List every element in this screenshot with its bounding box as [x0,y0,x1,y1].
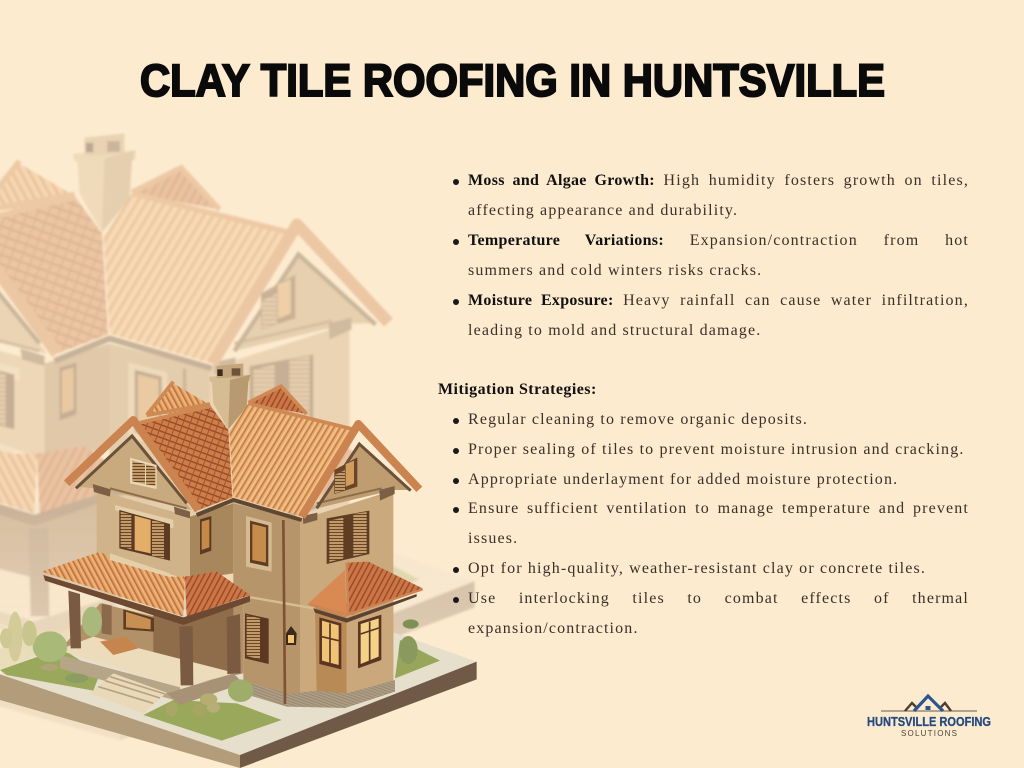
text: temperature variations line two: summers and cold winters risks cracks. [468,262,762,279]
bullet: underlayment [453,478,459,484]
text: proper sealing: Proper sealing of tiles to prevent moisture intrusion and cracking. [468,441,965,458]
main clay tile house with garden platform [0,363,477,768]
logo: Huntsville Roofing Solutions: SOLUTIONS [901,729,957,738]
title: CLAY TILE ROOFING IN HUNTSVILLE [140,55,885,106]
text: interlocking tiles line one: Use interlocking tiles to combat effects of thermal [468,590,969,607]
bullet: moisture exposure [453,299,459,305]
bullet: regular cleaning [453,418,459,424]
text: underlayment: Appropriate underlayment for added moisture protection. [468,471,898,488]
text: regular cleaning: Regular cleaning to remove organic deposits. [468,411,808,428]
text: ventilation line one: Ensure sufficient ventilation to manage temperature and prevent [468,500,969,517]
panel: roofing challenges and mitigation text [438,172,969,637]
faded background house [0,133,474,740]
text: moisture exposure line two: leading to mold and structural damage. [468,322,761,339]
logo: Huntsville Roofing Solutions [867,696,991,738]
bullet: ventilation [453,507,459,513]
bullet: moss and algae growth [453,179,459,185]
text: moss and algae line two: affecting appearance and durability. [468,202,738,219]
bullet: temperature variations [453,239,459,245]
bullet: proper sealing [453,448,459,454]
bullet: high-quality tiles [453,567,459,573]
bullet: interlocking tiles [453,597,459,603]
logo: Huntsville Roofing Solutions: HUNTSVILLE ROOFING [867,715,991,729]
text: temperature variations line one: Temperature Variations: Expansion/contraction from hot [468,232,969,249]
text: interlocking tiles line two: expansion/contraction. [468,620,639,637]
text: moss and algae line one: Moss and Algae Growth: High humidity fosters growth on tiles, [468,172,969,189]
text: moisture exposure line one: Moisture Exposure: Heavy rainfall can cause water infiltration, [468,292,969,309]
text: ventilation line two: issues. [468,530,518,547]
text: high-quality tiles: Opt for high-quality, weather-resistant clay or concrete tiles. [468,560,926,577]
heading: mitigation strategies: Mitigation Strategies: [438,381,597,398]
